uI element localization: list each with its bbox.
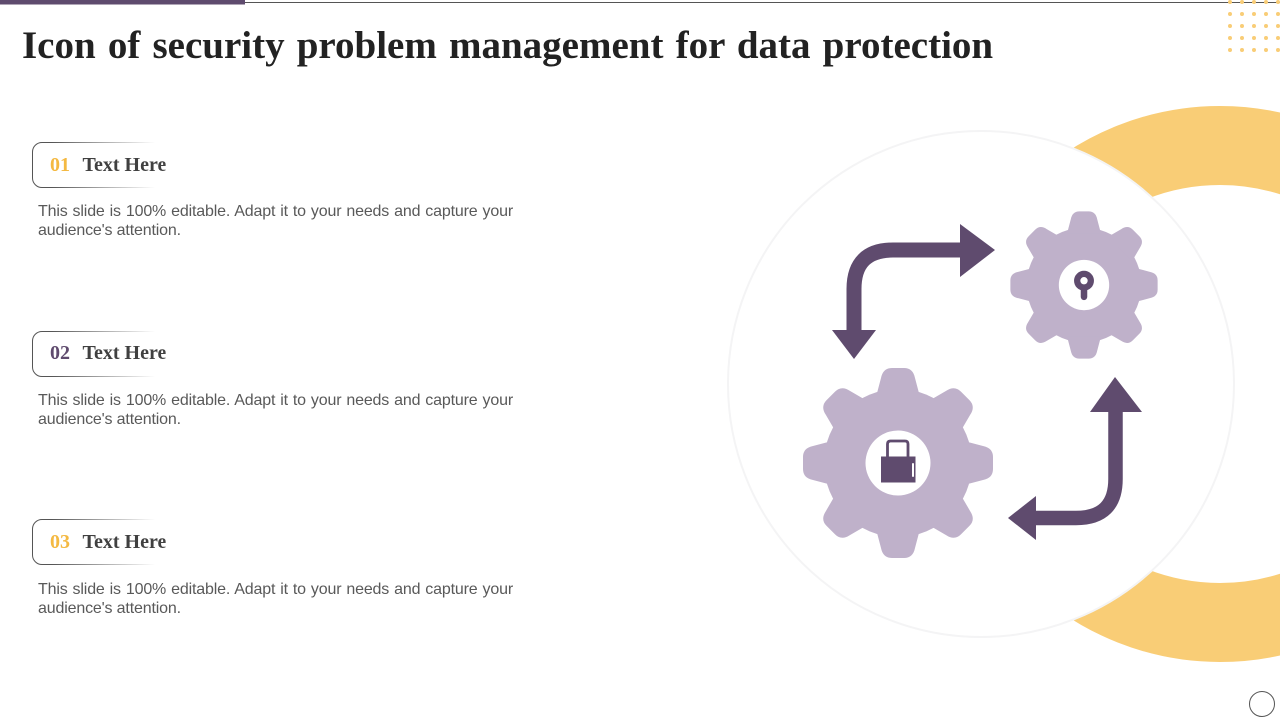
item 02 tag [32, 331, 166, 377]
label 03: Text Here [82, 531, 166, 553]
dot grid [1228, 0, 1280, 52]
item 01 description: This slide is 100% editable. Adapt it to your needs and capture your audience's attention. [38, 203, 513, 239]
title: Icon of security problem management for data protection [22, 24, 993, 67]
item 02 description: This slide is 100% editable. Adapt it to your needs and capture your audience's attention. [38, 392, 513, 428]
number 02: 02 [50, 342, 70, 364]
small gear with keyhole [1010, 211, 1158, 359]
item 01 tag [32, 142, 166, 188]
top accent bar [0, 0, 245, 4]
padlock icon [881, 441, 916, 482]
item 03 tag [32, 519, 166, 565]
large gear with padlock [803, 368, 993, 558]
item 03 description: This slide is 100% editable. Adapt it to your needs and capture your audience's attention. [38, 581, 513, 617]
central white circle [728, 131, 1234, 637]
arrow: gear loop top-left [832, 224, 995, 359]
number 03: 03 [50, 531, 70, 553]
arrow: gear loop bottom-right [1008, 377, 1142, 540]
number 01: 01 [50, 154, 70, 176]
keyhole icon [1077, 274, 1091, 300]
top rule [245, 2, 1280, 3]
label 01: Text Here [82, 154, 166, 176]
yellow ring [982, 146, 1280, 622]
corner circle [1250, 692, 1274, 716]
label 02: Text Here [82, 342, 166, 364]
